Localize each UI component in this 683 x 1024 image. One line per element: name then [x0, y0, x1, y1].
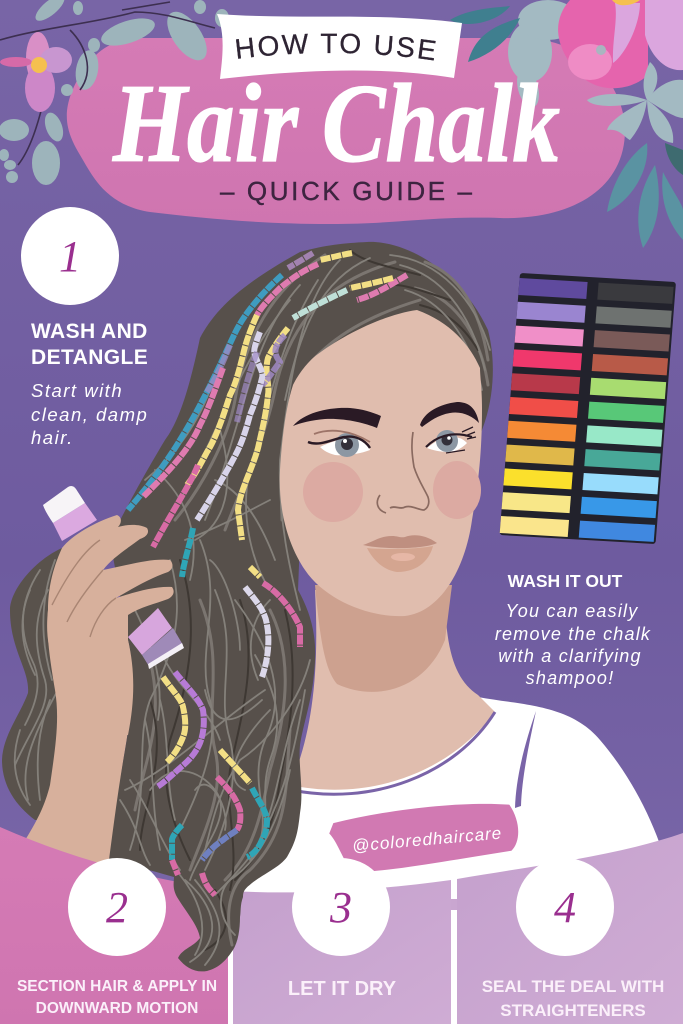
wash it out text: WASH IT OUT	[508, 571, 623, 591]
step 2 text: DOWNWARD MOTION	[36, 1000, 198, 1017]
step 1 number	[21, 207, 119, 305]
right eye	[426, 427, 476, 453]
step 2 text	[17, 978, 217, 1017]
blush	[303, 462, 363, 522]
lips	[363, 535, 437, 572]
hair: main mass	[109, 242, 493, 971]
step 4 text: SEAL THE DEAL WITH	[482, 977, 664, 996]
left eye	[308, 431, 370, 457]
floral: top left	[0, 0, 229, 185]
panel divider gap	[451, 899, 457, 910]
wash it out text: with a clarifying	[498, 646, 642, 666]
blush right	[433, 461, 481, 519]
step 1 text	[31, 320, 148, 448]
step 1 number: 1	[59, 232, 81, 281]
subtitle: quick guide: – QUICK GUIDE –	[220, 176, 473, 206]
wash it out text: shampoo!	[526, 668, 614, 688]
step 3 number: 3	[329, 883, 352, 932]
teal leaves	[607, 143, 683, 248]
step 2 number: 2	[106, 883, 128, 932]
wash it out text	[495, 571, 651, 688]
step 4 number: 4	[554, 883, 576, 932]
step 3 text: LET IT DRY	[288, 978, 397, 1000]
shirt	[200, 697, 662, 900]
neck shadow	[315, 585, 452, 692]
right brow	[420, 402, 479, 427]
panel dividers	[225, 880, 460, 1024]
step 1 text: Start with	[31, 380, 123, 401]
hair strands	[120, 255, 490, 965]
step 1 text: hair.	[31, 427, 74, 448]
watermark: @coloredhaircare: @coloredhaircare	[351, 823, 503, 856]
hair strands: left lobe	[15, 560, 58, 805]
step 4 text: STRAIGHTENERS	[500, 1001, 646, 1020]
step 3 number	[292, 858, 390, 956]
banner	[217, 14, 462, 79]
title blob	[67, 38, 625, 224]
colored chalk strands	[128, 253, 407, 895]
watermark: @coloredhaircare	[328, 799, 521, 875]
hair: left lobe behind arm	[2, 548, 90, 820]
arm	[22, 600, 132, 870]
neckline	[292, 712, 495, 794]
title: how to use: HOW TO USE	[236, 34, 436, 60]
panel: step 2 background	[0, 827, 228, 1024]
chalk palette photo	[500, 273, 676, 544]
pink flower	[558, 0, 683, 88]
floral: top right	[450, 0, 683, 248]
star flower	[587, 62, 683, 143]
face	[280, 310, 482, 616]
step 4 text	[482, 977, 664, 1020]
wash it out text: remove the chalk	[495, 624, 651, 644]
step 2 number	[68, 858, 166, 956]
step 1 text: DETANGLE	[31, 346, 148, 369]
hair shading	[140, 250, 478, 950]
title: hair chalk: Hair Chalk	[112, 62, 560, 186]
wash it out text: You can easily	[506, 601, 638, 621]
step 4 number	[516, 858, 614, 956]
nose	[377, 432, 429, 513]
neck and chest	[290, 585, 495, 794]
step 1 text: WASH AND	[31, 320, 148, 343]
left brow	[293, 408, 381, 428]
step 2 text: SECTION HAIR & APPLY IN	[17, 978, 217, 995]
flower	[0, 32, 72, 112]
panel: step 3 background	[233, 880, 451, 1024]
step 1 text: clean, damp	[31, 404, 148, 425]
hand	[47, 515, 174, 735]
chalk stick: upper cap	[43, 486, 97, 541]
chalk stick: lower part	[128, 608, 184, 669]
panel: step 4 background	[457, 833, 683, 1024]
hair wide highlights	[135, 255, 488, 945]
shirt seam	[515, 711, 536, 808]
